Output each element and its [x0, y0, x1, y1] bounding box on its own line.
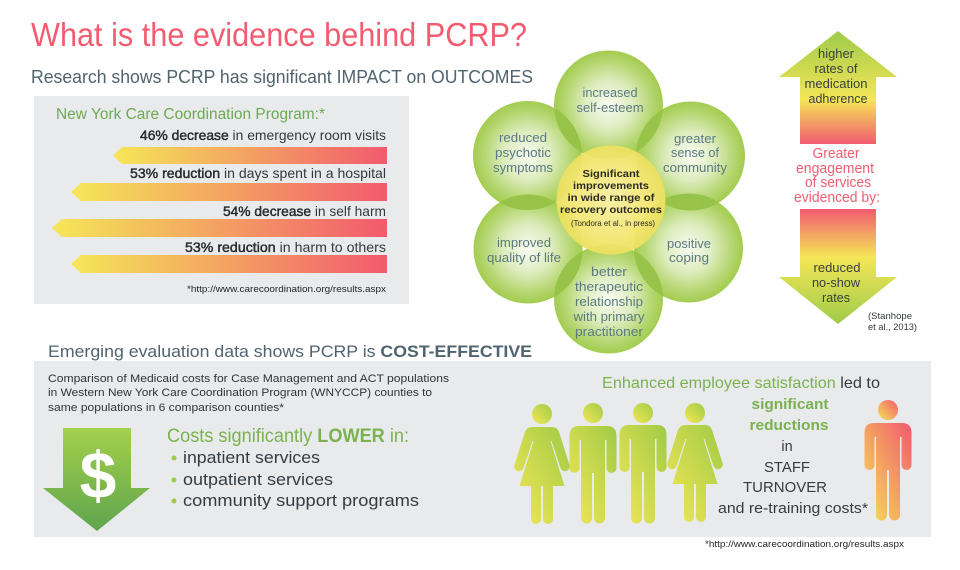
comparison text: in Western New York Care Coordination Program (WNYCCP) counties to [48, 387, 432, 399]
arrow: reduced no-show rates: rates [822, 290, 850, 305]
stat: self harm [52, 203, 387, 237]
stat: harm to others [71, 239, 387, 273]
petal: psychotic symptoms [493, 130, 554, 175]
center text: recovery outcomes [560, 204, 662, 216]
stat: emergency room visits [113, 127, 387, 164]
petal: self-esteem: self-esteem [576, 100, 644, 115]
bullet list: services: community support programs [183, 491, 419, 510]
citation: Stanhope: et al., 2013) [868, 322, 917, 333]
center text: Significant [582, 168, 640, 180]
flower diagram: recovery outcomes [473, 50, 745, 354]
stat: days spent in a hospital: 53% reduction in days spent in a hospital [130, 165, 386, 181]
arrow: higher medication adherence: adherence [808, 91, 868, 106]
panel heading: New York Care Coordination Program:* [56, 106, 325, 123]
petal: sense of community [663, 131, 727, 175]
arrow: reduced no-show rates [779, 209, 897, 324]
center text: in wide range of [568, 192, 655, 204]
petal: positive coping: positive [667, 236, 711, 251]
panel: cost and staffing [34, 361, 931, 537]
icon: red man [864, 400, 912, 520]
petal: sense of community: sense of [671, 145, 719, 160]
center text [560, 168, 662, 228]
petal: quality of life: improved [497, 235, 551, 250]
petal: therapeutic relationship [572, 264, 645, 339]
center text: (Tondora et al., in press) [571, 219, 655, 228]
heading: cost-effective: Emerging evaluation data shows PCRP is COST-EFFECTIVE [48, 342, 532, 361]
footnote: *http://www.carecoordination.org/results.aspx [705, 539, 904, 550]
text: employee satisfaction: in [781, 439, 793, 455]
icon: woman 2 [667, 403, 723, 522]
petal: therapeutic relationship: with primary [572, 309, 645, 324]
stat: days spent in a hospital [71, 165, 387, 201]
petal: therapeutic relationship: therapeutic [575, 279, 644, 294]
text: employee satisfaction [602, 375, 880, 517]
arrow: reduced no-show rates: no-show [812, 275, 861, 290]
arrow: higher medication adherence: higher [818, 46, 855, 61]
petal: quality of life [487, 235, 561, 265]
text: greater engagement: evidenced by: [794, 190, 880, 206]
petal: positive coping [667, 236, 711, 265]
bullet list: services [172, 448, 419, 510]
petal: therapeutic relationship: practitioner [575, 324, 644, 339]
panel: New York Care Coordination Program [34, 96, 409, 304]
title: What is the evidence behind PCRP? [31, 16, 527, 53]
stat: self harm: 54% decrease in self harm [223, 203, 386, 219]
arrow: higher medication adherence [779, 31, 897, 144]
citation: Stanhope [868, 311, 917, 333]
heading: costs lower: Costs significantly LOWER in: [167, 426, 409, 447]
text: employee satisfaction: and re-training costs* [718, 501, 868, 517]
icon: woman 1 [514, 404, 570, 524]
text: employee satisfaction: Enhanced employee satisfaction led to [602, 375, 880, 392]
stat: emergency room visits: 46% decrease in emergency room visits [140, 127, 386, 143]
petal: quality of life: quality of life [487, 250, 561, 265]
text: employee satisfaction: TURNOVER [743, 480, 827, 496]
footnote: *http://www.carecoordination.org/results.aspx [187, 284, 386, 295]
petal: self-esteem [576, 85, 644, 115]
icon: man 1 [570, 403, 616, 524]
text: greater engagement: engagement [796, 161, 874, 177]
text: greater engagement [794, 146, 880, 206]
center text: improvements [573, 180, 649, 192]
text: employee satisfaction: significant [752, 396, 828, 413]
text: greater engagement: Greater [812, 146, 860, 162]
petal: psychotic symptoms: reduced [499, 130, 547, 145]
text: greater engagement: of services [805, 175, 871, 191]
text: employee satisfaction: reductions [750, 417, 828, 434]
icon: man 2 [620, 403, 666, 524]
petal: positive coping: coping [669, 250, 709, 265]
arrow: higher medication adherence: rates of [814, 61, 858, 76]
petal: psychotic symptoms: psychotic [495, 145, 552, 160]
petal: self-esteem: increased [582, 85, 638, 100]
petal: sense of community: community [663, 160, 727, 175]
stat: harm to others: 53% reduction in harm to others [185, 239, 386, 255]
comparison text: same populations in 6 comparison counties* [48, 402, 285, 414]
comparison text: Comparison of Medicaid costs for Case Management and ACT populations [48, 373, 449, 385]
petal: therapeutic relationship: relationship [575, 294, 643, 309]
bullet list: services: inpatient services [183, 448, 320, 467]
citation: Stanhope: (Stanhope [868, 311, 912, 322]
comparison text [48, 373, 449, 414]
heading: impact on outcomes: Research shows PCRP has significant IMPACT on OUTCOMES [31, 66, 533, 87]
text: employee satisfaction: STAFF [764, 460, 810, 476]
bullet list: services: outpatient services [183, 470, 333, 489]
petal: psychotic symptoms: symptoms [493, 160, 554, 175]
arrow: higher medication adherence: medication [804, 76, 868, 91]
petal: therapeutic relationship: better [591, 264, 628, 279]
petal: sense of community: greater [674, 131, 717, 146]
arrow: reduced no-show rates: reduced [814, 260, 860, 275]
icon: dollar down arrow: $ [80, 438, 116, 512]
icon: dollar down arrow [43, 428, 150, 531]
